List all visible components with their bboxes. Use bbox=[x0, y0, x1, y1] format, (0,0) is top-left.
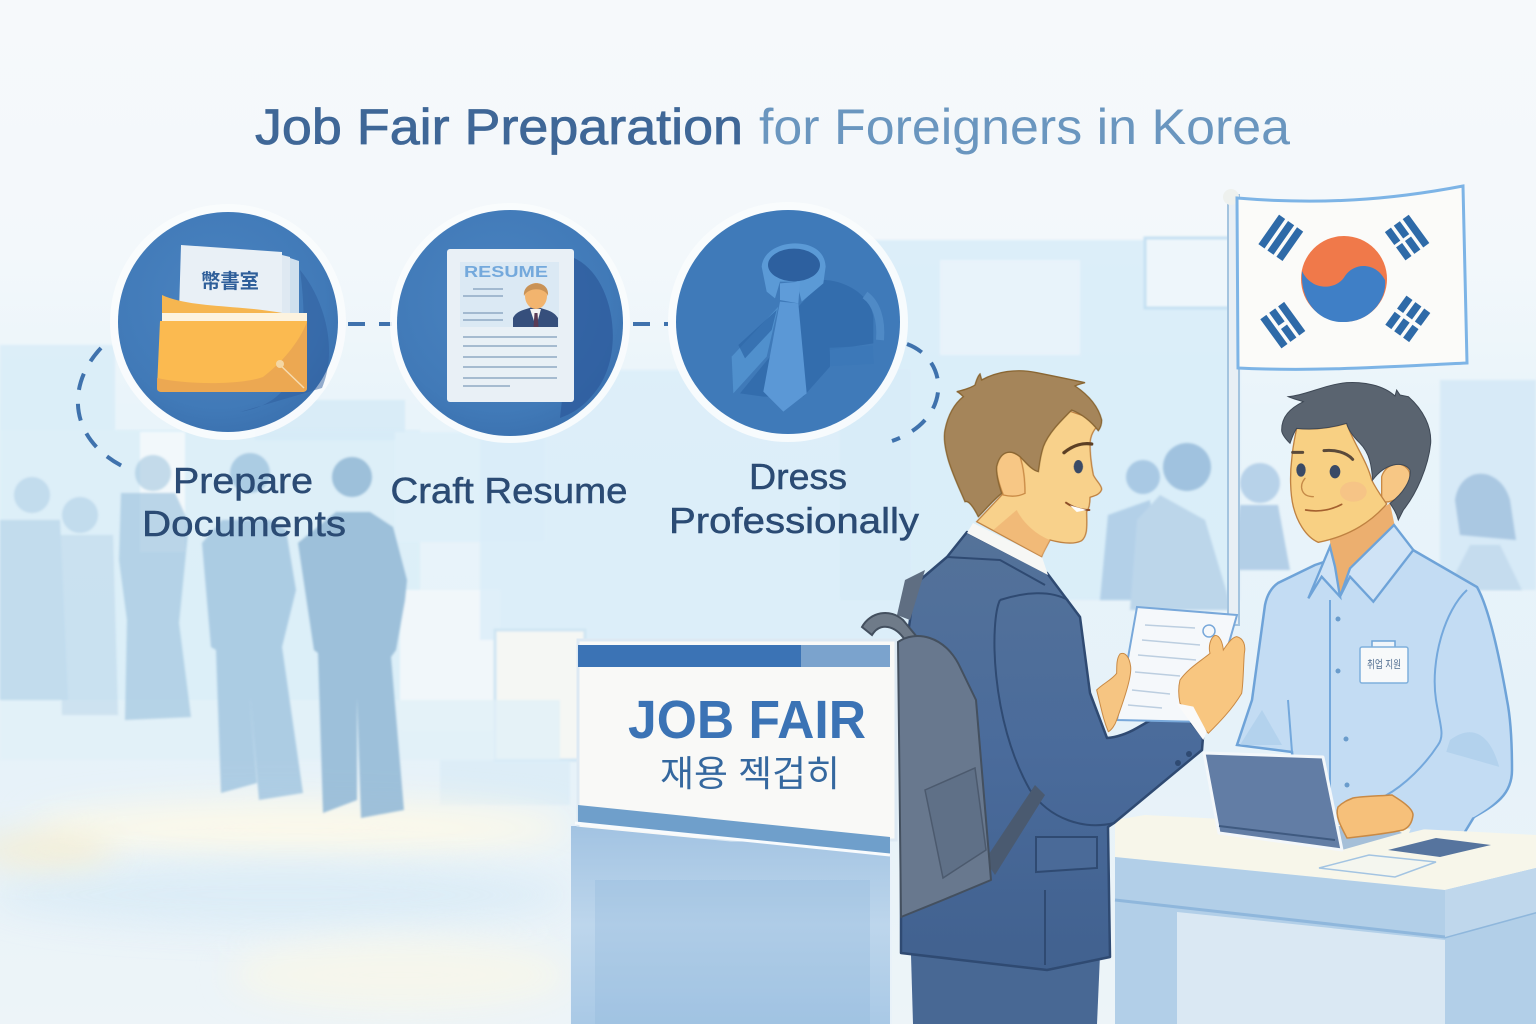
icon: collar and tie bbox=[732, 243, 826, 412]
left hand bbox=[1097, 653, 1131, 732]
suit pocket bbox=[1036, 837, 1097, 872]
title: for Foreigners in Korea bbox=[759, 99, 1290, 155]
trigrams bbox=[1258, 215, 1430, 348]
name badge: 취업 지원 bbox=[1367, 658, 1401, 671]
label: prepare documents bbox=[142, 460, 346, 544]
job seeker bbox=[862, 371, 1245, 1024]
title: Job Fair Preparation bbox=[255, 99, 743, 155]
background: blurred exhibition hall bbox=[0, 238, 1536, 805]
title bbox=[255, 99, 1290, 155]
backpack strap across jacket bbox=[985, 785, 1045, 875]
laptop bbox=[1204, 753, 1402, 850]
collar bbox=[1308, 525, 1413, 602]
step 1: prepare documents icon bbox=[110, 204, 346, 440]
background crowd: right bbox=[1100, 443, 1522, 610]
recruiter shirt bbox=[1237, 545, 1512, 840]
face details bbox=[1293, 450, 1367, 511]
hair bbox=[944, 371, 1102, 517]
name badge bbox=[1360, 641, 1408, 683]
label: prepare documents: Prepare bbox=[173, 460, 313, 501]
head bbox=[1291, 423, 1387, 542]
connector: dashed path bbox=[78, 324, 938, 468]
right hand bbox=[1179, 635, 1245, 733]
label: dress professionally bbox=[669, 456, 919, 541]
korean flag bbox=[1237, 186, 1467, 369]
step 3: dress professionally icon bbox=[668, 202, 908, 442]
icon: papers in folder: 幣書室 bbox=[201, 270, 259, 293]
booth sign: 재용 젝겁히 bbox=[660, 753, 840, 794]
neck bbox=[1330, 503, 1397, 593]
icon: yellow folder bbox=[157, 295, 307, 392]
label: craft resume: Craft Resume bbox=[390, 470, 628, 511]
sleeve and jacket seams bbox=[947, 557, 1114, 965]
ear bbox=[1382, 464, 1410, 502]
booth sign: JOB FAIR bbox=[628, 690, 866, 750]
taegeuk bbox=[1301, 236, 1387, 322]
icon: shirt shadow and pocket bbox=[740, 280, 880, 397]
trousers bbox=[911, 955, 1100, 1024]
step 2: craft resume icon bbox=[390, 203, 630, 443]
icon: portrait bbox=[513, 283, 558, 327]
recruiter hand and cuff bbox=[1337, 750, 1510, 838]
label: dress professionally: Dress bbox=[749, 456, 847, 497]
background: floor patches bbox=[0, 800, 570, 1010]
label: prepare documents: Documents bbox=[142, 503, 346, 544]
booth sign bbox=[571, 640, 896, 1024]
desk bbox=[1115, 815, 1536, 1024]
shirt folds and buttons bbox=[1240, 590, 1500, 840]
neck and face bbox=[977, 410, 1102, 557]
backpack bbox=[862, 570, 991, 917]
icon: papers in folder bbox=[179, 245, 299, 327]
ear bbox=[996, 452, 1025, 496]
background crowd: left bbox=[0, 453, 407, 818]
shirt collar bbox=[967, 523, 1048, 575]
sleeve buttons bbox=[1175, 751, 1192, 766]
icon: resume sheet: RESUME bbox=[464, 264, 548, 281]
phone and papers on desk bbox=[1319, 838, 1491, 877]
job fair booth bbox=[571, 640, 896, 1024]
face details bbox=[1064, 444, 1092, 512]
flag pole bbox=[1223, 189, 1239, 625]
resume paper bbox=[1117, 607, 1237, 722]
label: dress professionally: Professionally bbox=[669, 500, 919, 541]
hair bbox=[1282, 382, 1431, 520]
recruiter bbox=[1237, 382, 1512, 840]
shirt cuff bbox=[1177, 703, 1207, 740]
step labels bbox=[142, 456, 919, 544]
neck shadow bbox=[993, 510, 1050, 557]
icon: resume sheet bbox=[447, 249, 574, 402]
suit jacket bbox=[901, 532, 1203, 970]
